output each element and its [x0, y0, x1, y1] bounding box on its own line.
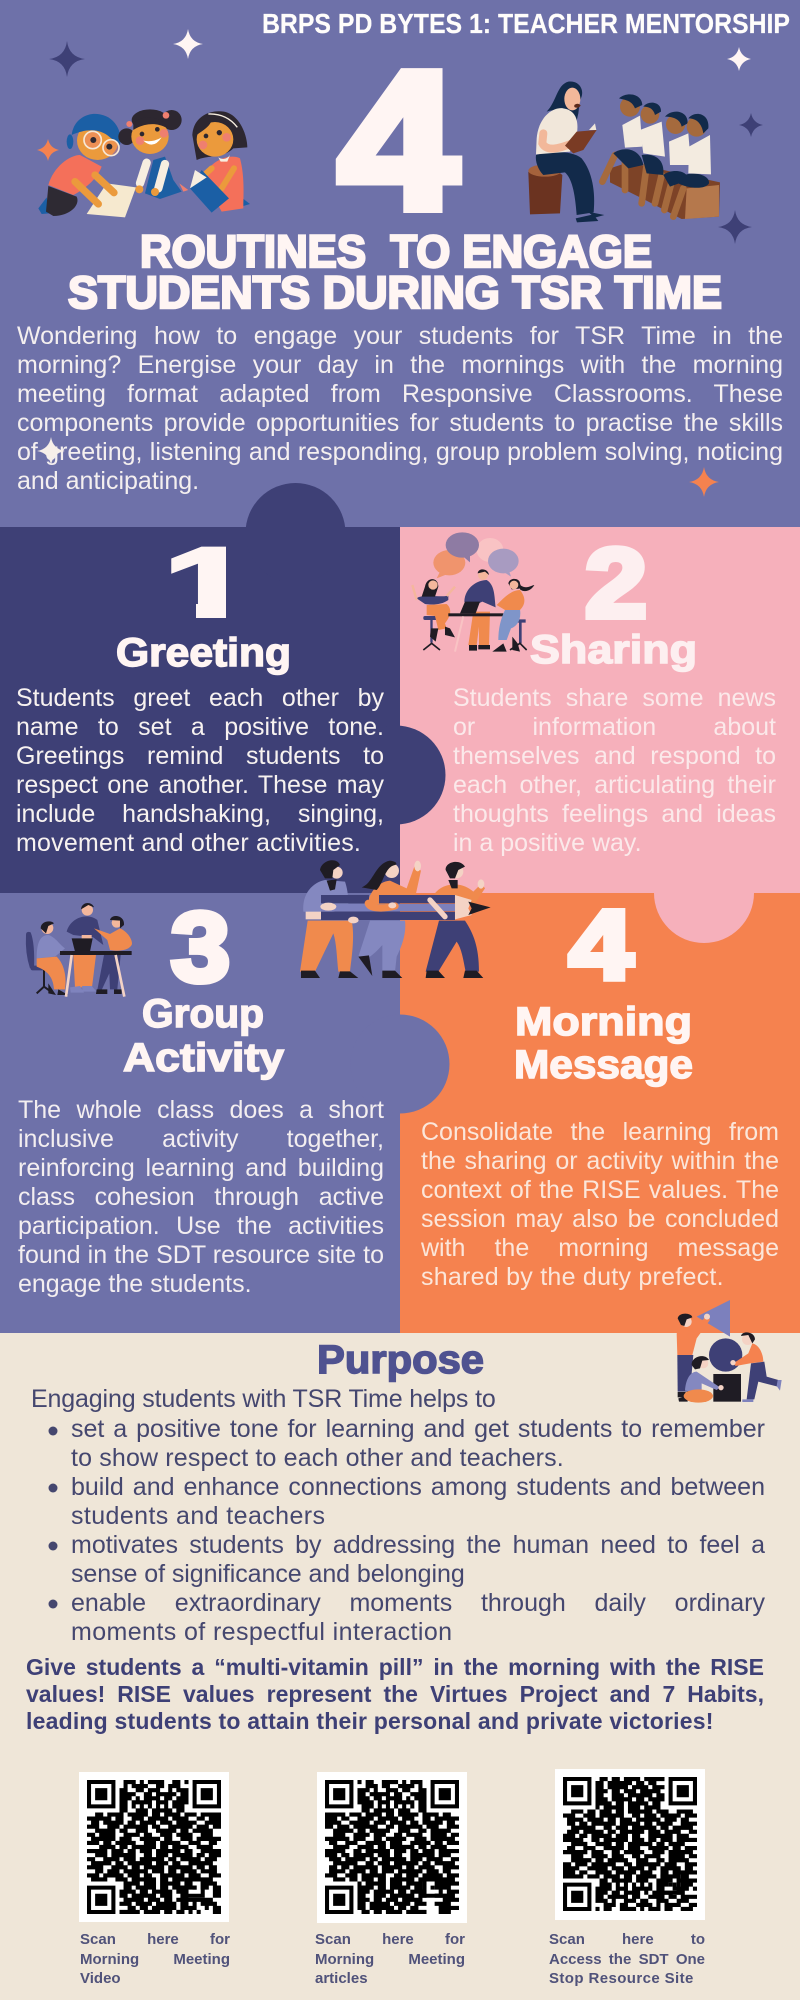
numeral 2: 2: [585, 528, 647, 638]
intro paragraph: and anticipating.: [17, 467, 199, 495]
text: greeting description: Students greet each other by: [16, 684, 384, 712]
text: purpose bullet list: moments of respectful interaction: [71, 1618, 452, 1646]
intro paragraph: Wondering how to engage your students for TSR Time in the: [17, 322, 783, 350]
icon: dark star right: [718, 210, 752, 244]
text: sharing description: in a positive way.: [453, 829, 642, 857]
text: greeting description: name to set a positive tone.: [16, 713, 384, 741]
text: purpose lead-in: Engaging students with TSR Time helps to: [31, 1385, 496, 1413]
text: morning message description: session may also be concluded: [421, 1205, 779, 1233]
text: morning message description: the sharing or activity within the: [421, 1147, 779, 1175]
QR code 1: [79, 1772, 229, 1922]
text: group activity description: [18, 1096, 384, 1298]
caption: QR 1: [80, 1931, 230, 1987]
text: morning message description: Consolidate the learning from: [421, 1118, 779, 1146]
text: greeting description: [16, 684, 384, 857]
text: morning message description: with the morning message: [421, 1234, 779, 1262]
puzzle tab: group activity into morning message: [350, 1014, 450, 1114]
caption: QR 1: Scan here for: [80, 1931, 230, 1948]
heading: Morning Message: Message: [514, 1043, 693, 1087]
text: sharing description: each other, articulating their: [453, 771, 776, 799]
text: purpose bullet list: motivates students by addressing the human need to feel a: [71, 1531, 765, 1559]
text: purpose bullet list: sense of significance and belonging: [71, 1560, 465, 1588]
illustration: people sharing around a table: [412, 532, 534, 652]
heading: Group Activity: Activity: [123, 1036, 285, 1080]
heading: Morning Message: Morning: [515, 1000, 692, 1044]
text: purpose bullet list: set a positive tone for learning and get students to remember: [71, 1415, 765, 1443]
text: group activity description: found in the SDT resource site to: [18, 1241, 384, 1269]
text: multi-vitamin callout: [26, 1654, 764, 1734]
text: sharing description: [453, 684, 776, 857]
heading: Morning Message: [514, 1000, 693, 1087]
text: greeting description: include handshaking, singing,: [16, 800, 384, 828]
heading: Sharing: Sharing: [530, 628, 697, 672]
icon: white star top right: [727, 47, 751, 71]
icon: white star top: [173, 29, 203, 59]
panel: purpose background: [0, 1333, 800, 2000]
panel: header background: [0, 0, 800, 527]
text: purpose bullet list: [71, 1415, 765, 1646]
text: group activity description: reinforcing learning and building: [18, 1154, 384, 1182]
caption: QR 3: [549, 1931, 705, 1987]
puzzle tab: greeting into sharing: [346, 726, 446, 824]
intro paragraph: [17, 322, 783, 495]
text: purpose bullet list: to show respect to each other and teachers.: [71, 1444, 564, 1472]
heading: Group Activity: Group: [142, 992, 264, 1036]
text: sharing description: Students share some news: [453, 684, 776, 712]
caption: QR 3: Access the SDT One: [549, 1950, 705, 1968]
text: multi-vitamin callout: leading students to attain their personal and private victories!: [26, 1708, 714, 1734]
icon: orange star left: [37, 139, 59, 161]
text: purpose bullet list: build and enhance connections among students and between: [71, 1473, 765, 1501]
text: purpose bullet list: enable extraordinary moments through daily ordinary: [71, 1589, 765, 1617]
text: greeting description: Greetings remind students to: [16, 742, 384, 770]
QR code 3: [555, 1769, 705, 1920]
text: group activity description: participation. Use the activities: [18, 1212, 384, 1240]
text: group activity description: class cohesion through active: [18, 1183, 384, 1211]
main heading: STUDENTS DURING TSR TIME: [68, 267, 722, 318]
intro paragraph: components provide opportunities for students to practise the skills: [17, 409, 783, 437]
panel: greeting background: [0, 483, 400, 893]
text: greeting description: movement and other activities.: [16, 829, 361, 857]
icon: white star over intro text: [37, 437, 65, 465]
intro paragraph: morning? Energise your day in the mornings with the morning: [17, 351, 783, 379]
text: morning message description: context of the RISE values. The: [421, 1176, 779, 1204]
text: sharing description: themselves and respond to: [453, 742, 776, 770]
caption: QR 2: [315, 1931, 465, 1987]
text: group activity description: engage the students.: [18, 1270, 252, 1298]
QR code 2: [317, 1772, 467, 1923]
illustration: teacher reading to students: [528, 82, 720, 222]
puzzle tab: sharing into morning message: [654, 843, 754, 943]
illustration: three people carrying a pencil: [300, 860, 491, 978]
heading: Purpose: Purpose: [317, 1338, 484, 1382]
numeral 4 in morning message panel: 4: [569, 890, 633, 1000]
panel: sharing background: [400, 527, 800, 893]
text: group activity description: inclusive activity together,: [18, 1125, 384, 1153]
caption: QR 3: Scan here to: [549, 1931, 705, 1948]
panel: group activity background: [0, 893, 400, 1333]
main heading: [68, 226, 722, 318]
illustration: children reading: [38, 109, 250, 217]
panel: morning message background: [400, 893, 800, 1333]
numeral 3: 3: [171, 892, 230, 1002]
caption: QR 1: Morning Meeting: [80, 1950, 230, 1968]
numeral 1: 1: [164, 527, 254, 637]
caption: QR 3: Stop Resource Site: [549, 1970, 694, 1987]
intro paragraph: meeting format adapted from Responsive Classrooms. These: [17, 380, 783, 408]
icon: dark star top left: [49, 41, 85, 77]
intro paragraph: of greeting, listening and responding, group problem solving, noticing: [17, 438, 783, 466]
illustration: group working at a laptop: [26, 903, 132, 997]
heading: Greeting: Greeting: [116, 631, 291, 675]
text: morning message description: shared by the duty prefect.: [421, 1263, 724, 1291]
text: sharing description: thoughts feelings and ideas: [453, 800, 776, 828]
caption: QR 2: articles: [315, 1970, 368, 1987]
caption: QR 2: Scan here for: [315, 1931, 465, 1948]
icon: orange star lower right: [689, 467, 719, 497]
text: greeting description: respect one another. These may: [16, 771, 384, 799]
text: morning message description: [421, 1118, 779, 1291]
icon: small dark star right: [739, 113, 763, 137]
text: purpose bullet list: students and teachers: [71, 1502, 325, 1530]
text: group activity description: The whole class does a short: [18, 1096, 384, 1124]
text: multi-vitamin callout: Give students a “multi-vitamin pill” in the morning with the RISE: [26, 1654, 764, 1680]
caption: QR 1: Video: [80, 1970, 121, 1987]
caption: QR 2: Morning Meeting: [315, 1950, 465, 1968]
large numeral 4: 4: [338, 31, 458, 250]
text: sharing description: or information about: [453, 713, 776, 741]
bullet markers: [48, 1426, 58, 1608]
text: multi-vitamin callout: values! RISE values represent the Virtues Project and 7 Habits,: [26, 1681, 764, 1707]
main heading: ROUTINES TO ENGAGE: [140, 226, 652, 277]
heading: Group Activity: [123, 992, 285, 1080]
illustration: team with shapes: [677, 1300, 782, 1403]
